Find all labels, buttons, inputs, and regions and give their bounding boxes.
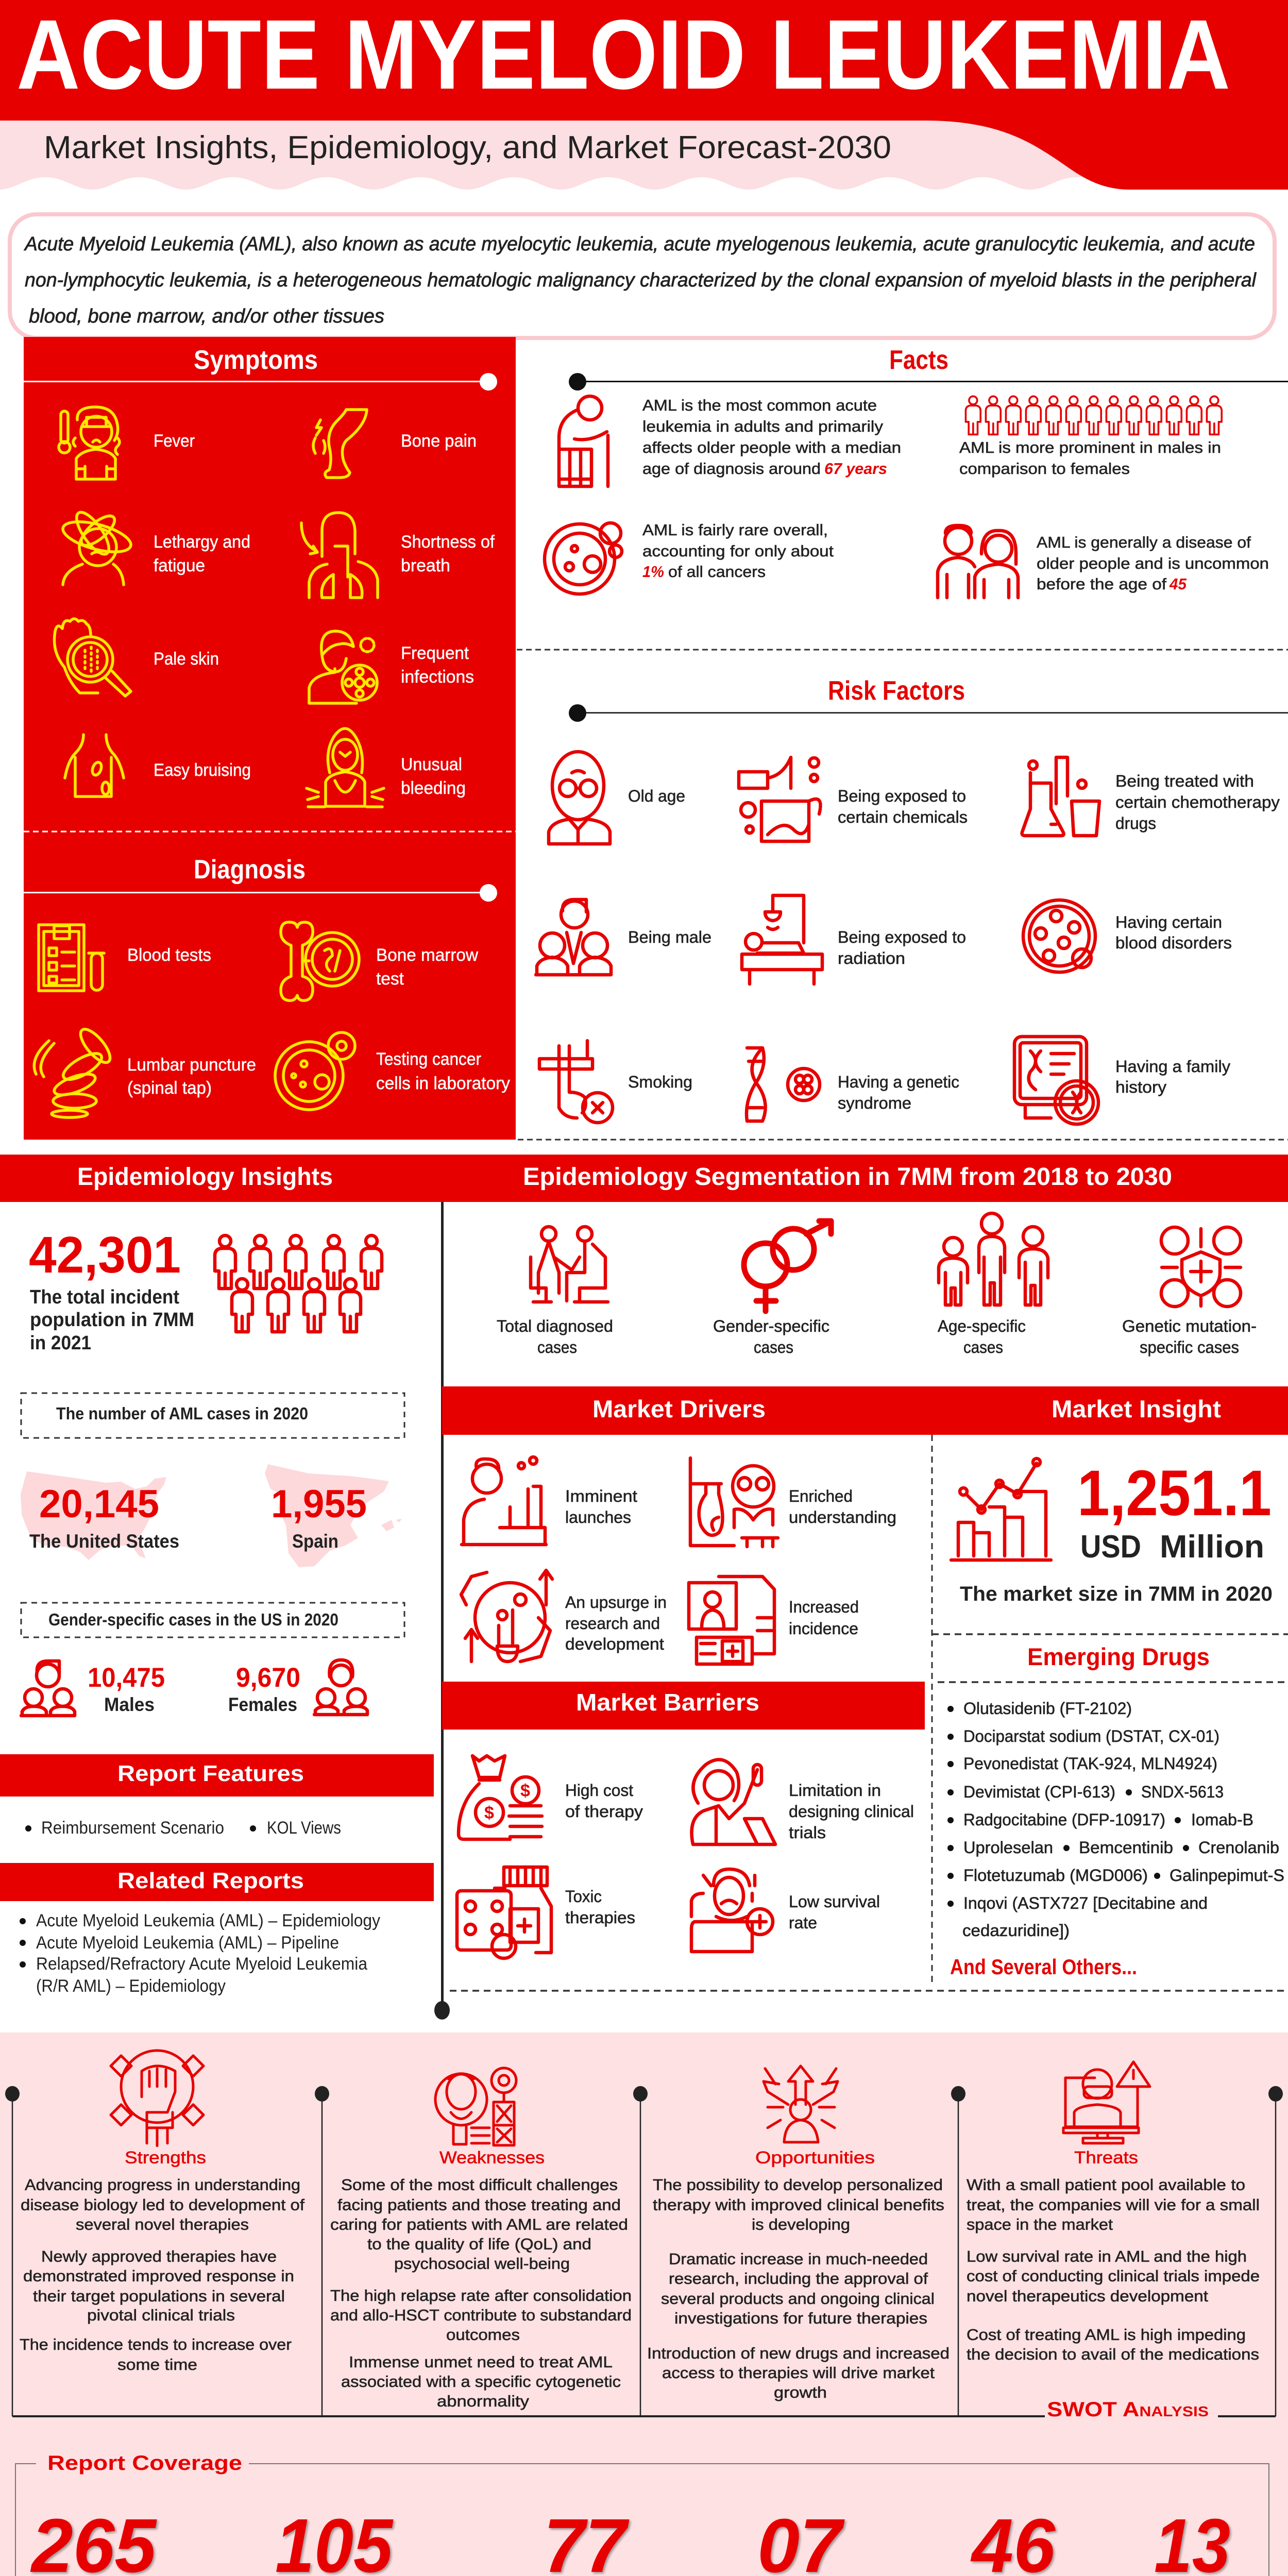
panel: market barriers xyxy=(442,1682,925,1958)
intro definition box xyxy=(10,214,1275,338)
icon: easy bruising xyxy=(65,735,124,796)
icon: old age xyxy=(549,752,610,844)
label: unusual bleeding: bleeding xyxy=(401,778,466,798)
label: high cost xyxy=(565,1781,643,1821)
drug list: Devimistat (CPI-613) xyxy=(963,1783,1115,1801)
header banner xyxy=(0,0,1288,190)
text: threats: novel therapeutics development xyxy=(967,2287,1208,2305)
intro definition box: non-lymphocytic leukemia, is a heterogeneous hematologic malignancy characterized by the clonal expansion of myeloid blasts in the peripheral xyxy=(25,269,1257,291)
stat: market size: Million xyxy=(1160,1529,1264,1565)
label: age-specific: cases xyxy=(963,1338,1003,1357)
label: limitation xyxy=(789,1781,914,1842)
and several others: And Several Others... xyxy=(950,1955,1137,1979)
label: testing cancer cells: cells in laboratory xyxy=(376,1074,510,1093)
label: chemicals: certain chemicals xyxy=(838,808,968,826)
text: strengths: some time xyxy=(117,2355,197,2374)
fact: older people: before the age of xyxy=(1037,575,1166,593)
text: threats: cost of conducting clinical trials impede xyxy=(967,2267,1260,2285)
label: blood tests: Blood tests xyxy=(127,945,211,965)
text: opportunities: research, including the approval of xyxy=(669,2269,928,2287)
drug list: Inqovi (ASTX727 [Decitabine and xyxy=(963,1894,1208,1912)
text: weaknesses: The high relapse rate after consolidation xyxy=(330,2286,632,2304)
lower pink background xyxy=(0,2032,1288,2576)
fact: most common xyxy=(642,396,901,478)
label: lethargy and fatigue: fatigue xyxy=(154,556,205,575)
text: threats: treat, the companies will vie for a small xyxy=(967,2196,1260,2214)
label: unusual bleeding: Unusual xyxy=(401,755,462,774)
label: radiation: radiation xyxy=(838,949,905,968)
fact: older people: older people and is uncommon xyxy=(1037,554,1269,572)
icon: females xyxy=(314,1660,367,1715)
label: research upsurge: An upsurge in xyxy=(565,1593,667,1612)
text: weaknesses xyxy=(330,2176,632,2410)
text: threats: Cost of treating AML is high impeding xyxy=(967,2326,1246,2344)
section: report features xyxy=(0,1754,434,1838)
label: shortness of breath: Shortness of xyxy=(401,532,495,552)
label: imminent launches: Imminent xyxy=(565,1487,637,1505)
band: market barriers heading xyxy=(442,1682,925,1730)
icon: threats xyxy=(1063,2062,1150,2143)
drug list: Flotetuzumab (MGD006) xyxy=(963,1866,1148,1885)
intro definition box: Acute Myeloid Leukemia (AML), also known as acute myelocytic leukemia, acute myelogenous leukemia, acute granulocytic leukemia, and acute xyxy=(24,233,1255,255)
icon: population figures xyxy=(215,1235,382,1332)
icon: age groups xyxy=(939,1213,1048,1305)
icon: pale skin xyxy=(54,619,131,696)
text: weaknesses: caring for patients with AML are related xyxy=(330,2215,628,2233)
drug list: Dociparstat sodium (DSTAT, CX-01) xyxy=(963,1727,1219,1745)
icon: smoking xyxy=(539,1041,613,1123)
icon: lumbar puncture xyxy=(34,1025,115,1117)
text: strengths: disease biology led to development of xyxy=(21,2196,304,2214)
label: testing cancer cells: Testing cancer xyxy=(376,1049,481,1069)
text: strengths: The incidence tends to increase over xyxy=(20,2335,292,2353)
panel: symptoms and diagnosis xyxy=(24,337,516,1140)
band: epidemiology headers: Epidemiology Insights xyxy=(77,1163,333,1191)
map: United States xyxy=(21,1471,179,1560)
heading: strengths: Strengths xyxy=(125,2148,206,2167)
label: chemotherapy xyxy=(1115,772,1280,833)
text: weaknesses: abnormality xyxy=(437,2392,530,2410)
label: total diagnosed: cases xyxy=(537,1338,577,1357)
panel: epidemiology insights xyxy=(21,1226,404,1716)
icon: high cost: $ xyxy=(484,1803,494,1823)
drug list: Pevonedistat (TAK-924, MLN4924) xyxy=(963,1754,1217,1773)
label: age-specific xyxy=(938,1317,1026,1357)
label: increased incidence: incidence xyxy=(789,1619,858,1638)
heading: weaknesses: Weaknesses xyxy=(439,2148,545,2167)
band: market drivers and insight xyxy=(442,1386,1288,1435)
label: bone marrow test: Bone marrow xyxy=(376,945,478,965)
icon: chemicals xyxy=(739,757,820,841)
label: shortness of breath xyxy=(401,532,495,575)
label: lethargy and fatigue: Lethargy and xyxy=(154,532,250,552)
heading: threats: Threats xyxy=(1074,2148,1138,2167)
text: opportunities: access to therapies will drive market xyxy=(662,2364,935,2382)
section: related reports xyxy=(0,1863,434,1996)
stat: 42,301: in 2021 xyxy=(30,1332,91,1354)
coverage stats xyxy=(30,2503,1230,2576)
heading: report coverage: Report Coverage xyxy=(47,2452,242,2475)
drug list: Crenolanib xyxy=(1198,1838,1279,1857)
label: increased incidence xyxy=(789,1598,859,1638)
label: SWOT analysis: SWOT Analysis xyxy=(1047,2398,1209,2421)
label: chemotherapy: Being treated with xyxy=(1115,772,1254,790)
heading: facts: Facts xyxy=(889,345,948,375)
label: lethargy and fatigue xyxy=(154,532,250,575)
section: related reports: (R/R AML) – Epidemiology xyxy=(36,1976,226,1996)
label: high cost: High cost xyxy=(565,1781,633,1800)
icon: bone pain xyxy=(313,410,367,478)
band: epidemiology headers: Epidemiology Segmentation in 7MM from 2018 to 2030 xyxy=(523,1163,1172,1191)
drug list: Galinpepimut-S xyxy=(1170,1866,1284,1885)
icon: testing cancer cells xyxy=(275,1032,355,1110)
text: strengths: Newly approved therapies have xyxy=(41,2247,277,2265)
icon: genetic syndrome xyxy=(747,1048,820,1121)
text: weaknesses: psychosocial well-being xyxy=(394,2255,570,2273)
label: low survival: rate xyxy=(789,1913,817,1932)
fact: rare: AML is fairly rare overall, xyxy=(642,521,828,539)
stat: market size: 1,251.1 xyxy=(1077,1458,1272,1529)
band: market barriers heading: Market Barriers xyxy=(576,1689,759,1716)
icon: increased incidence xyxy=(689,1577,774,1664)
label: genetic mutation: specific cases xyxy=(1140,1338,1239,1357)
section: related reports: Related Reports xyxy=(117,1868,304,1893)
icon: being male xyxy=(536,900,611,975)
heading: symptoms: Symptoms xyxy=(194,345,318,375)
label: enriched understanding: Enriched xyxy=(789,1487,853,1505)
icon: toxic therapies xyxy=(457,1867,551,1958)
icon: shortness of breath xyxy=(301,513,378,598)
label: family history: Having a family xyxy=(1115,1057,1230,1076)
label: gender-specific: Gender-specific xyxy=(713,1317,829,1335)
icon: high cost xyxy=(459,1756,542,1839)
heading: risk factors xyxy=(569,676,1288,722)
label: lumbar puncture xyxy=(127,1055,256,1098)
icon: gender symbols xyxy=(744,1221,831,1311)
label: chemotherapy: certain chemotherapy xyxy=(1115,793,1280,811)
text: opportunities: The possibility to develop personalized xyxy=(653,2176,943,2194)
label: being male: Being male xyxy=(628,928,711,946)
icon: fever xyxy=(59,407,120,479)
heading: risk factors: Risk Factors xyxy=(828,676,965,706)
label: blood disorders xyxy=(1115,913,1232,952)
section: related reports: Acute Myeloid Leukemia (AML) – Pipeline xyxy=(36,1933,339,1953)
label: genetic syndrome xyxy=(838,1073,959,1112)
panel: risk factors xyxy=(536,676,1288,1124)
section: report features: KOL Views xyxy=(267,1818,341,1838)
stat: market size: USD xyxy=(1080,1529,1141,1565)
fact: males: AML is more prominent in males in xyxy=(959,438,1221,456)
label: total diagnosed: Total diagnosed xyxy=(497,1317,613,1335)
text: strengths: demonstrated improved response in xyxy=(23,2267,294,2285)
icon: chemotherapy drugs xyxy=(1022,757,1099,836)
label: low survival: Low survival xyxy=(789,1892,880,1911)
label: gender-specific: cases xyxy=(754,1338,793,1357)
icon: enriched understanding xyxy=(690,1458,778,1547)
icon: row of people xyxy=(965,396,1222,434)
dashed label: gender-specific cases: Gender-specific cases in the US in 2020 xyxy=(48,1610,338,1629)
label: toxic therapies xyxy=(565,1887,635,1927)
label: unusual bleeding xyxy=(401,755,466,798)
text: opportunities: Dramatic increase in much-needed xyxy=(669,2250,928,2268)
label: increased incidence: Increased xyxy=(789,1598,859,1616)
label: frequent infections: Frequent xyxy=(401,643,469,663)
stat: females: 9,670 xyxy=(236,1663,300,1693)
band: market drivers and insight: Market Insight xyxy=(1052,1395,1221,1422)
label: toxic therapies: therapies xyxy=(565,1908,635,1927)
panel: report coverage xyxy=(15,2452,1269,2576)
label: blood disorders: Having certain xyxy=(1115,913,1222,931)
icon: imminent launches xyxy=(462,1457,546,1545)
label: age-specific: Age-specific xyxy=(938,1317,1026,1335)
map: Spain xyxy=(265,1464,402,1567)
label: research upsurge: research and xyxy=(565,1614,660,1633)
intro definition box: blood, bone marrow, and/or other tissues xyxy=(29,306,384,327)
heading: facts xyxy=(569,345,1288,391)
fact: rare: of all cancers xyxy=(668,563,766,581)
drug list: cedazuridine]) xyxy=(962,1921,1070,1940)
fact: rare: accounting for only about xyxy=(642,542,834,560)
subtitle: Market Insights, Epidemiology, and Market Forecast-2030 xyxy=(44,130,891,165)
label: bone pain: Bone pain xyxy=(401,431,477,451)
label: enriched understanding xyxy=(789,1487,896,1527)
label: research upsurge: development xyxy=(565,1635,664,1653)
fact: rare: 1% xyxy=(642,563,664,581)
icon: frequent infections xyxy=(309,631,377,703)
panel: emerging drugs xyxy=(938,1643,1288,1979)
map: United States: 20,145 xyxy=(39,1482,159,1526)
text: weaknesses: Some of the most difficult challenges xyxy=(341,2176,618,2194)
label: frequent infections: infections xyxy=(401,667,474,687)
label: limitation: Limitation in xyxy=(789,1781,881,1800)
icon: family history xyxy=(1014,1037,1098,1124)
map: United States: The United States xyxy=(29,1531,179,1552)
text: threats: the decision to avail of the medications xyxy=(967,2345,1259,2363)
icon: low survival xyxy=(691,1869,773,1952)
section: related reports: Acute Myeloid Leukemia (AML) – Epidemiology xyxy=(36,1911,380,1930)
label: imminent launches: launches xyxy=(565,1508,631,1527)
dashed label: gender-specific cases xyxy=(21,1603,404,1637)
icon: unusual bleeding xyxy=(307,728,384,807)
stat: market size: The market size in 7MM in 2020 xyxy=(960,1583,1273,1605)
icon: lethargy and fatigue xyxy=(60,507,134,585)
label: testing cancer cells xyxy=(376,1049,510,1093)
icon: total diagnosed xyxy=(531,1227,608,1302)
swot frame xyxy=(5,2086,1283,2416)
stat: 42,301 xyxy=(29,1226,194,1354)
text: weaknesses: facing patients and those treating and xyxy=(337,2196,621,2214)
dashed label: number of cases: The number of AML cases in 2020 xyxy=(56,1404,308,1423)
vertical divider xyxy=(434,1202,450,2020)
fact: most common: age of diagnosis around xyxy=(642,460,821,478)
text: weaknesses: associated with a specific cytogenetic xyxy=(341,2372,621,2391)
fact: most common: AML is the most common acute xyxy=(642,396,877,414)
text: strengths: their target populations in several xyxy=(33,2287,285,2305)
label: lumbar puncture: Lumbar puncture xyxy=(127,1055,256,1075)
text: threats: With a small patient pool available to xyxy=(967,2176,1245,2194)
icon: genetic mutation xyxy=(1161,1227,1241,1307)
text: weaknesses: outcomes xyxy=(446,2326,520,2344)
text: strengths: Advancing progress in understanding xyxy=(25,2176,300,2194)
drug list: SNDX-5613 xyxy=(1141,1783,1224,1801)
label: blood disorders: blood disorders xyxy=(1115,934,1232,952)
label: total diagnosed xyxy=(497,1317,613,1357)
text: threats: Low survival rate in AML and the high xyxy=(967,2247,1247,2265)
fact: most common: 67 years xyxy=(824,460,887,478)
icon: blood disorders xyxy=(1023,900,1095,972)
icon: clinical trial limitation xyxy=(691,1759,775,1844)
label: shortness of breath: breath xyxy=(401,556,450,575)
label: bone marrow test xyxy=(376,945,478,989)
section: report features: Reimbursement Scenario xyxy=(41,1818,224,1838)
icon: radiation xyxy=(742,895,822,984)
fact: most common: affects older people with a median xyxy=(642,438,901,456)
text: opportunities: Introduction of new drugs and increased xyxy=(647,2344,950,2362)
stat: 42,301: population in 7MM xyxy=(30,1309,194,1331)
icon: cancer cell xyxy=(545,523,622,594)
label: frequent infections xyxy=(401,643,474,687)
label: high cost: of therapy xyxy=(565,1802,643,1821)
label: fever: Fever xyxy=(154,431,195,451)
band: market drivers and insight: Market Drivers xyxy=(592,1395,766,1422)
heading: emerging drugs: Emerging Drugs xyxy=(1027,1643,1210,1670)
label: low survival xyxy=(789,1892,880,1932)
icon: weaknesses xyxy=(435,2068,516,2145)
fact: older people: AML is generally a disease of xyxy=(1037,533,1251,551)
text: weaknesses: Immense unmet need to treat AML xyxy=(349,2353,613,2371)
drug list: Uproleselan xyxy=(963,1838,1053,1857)
label: chemicals xyxy=(838,787,968,826)
SWOT analysis xyxy=(5,2050,1283,2421)
label: genetic syndrome: Having a genetic xyxy=(838,1073,959,1091)
icon: opportunities xyxy=(764,2066,838,2142)
drug list: Iomab-B xyxy=(1191,1810,1253,1829)
stat: males: 10,475 xyxy=(88,1663,165,1693)
label: enriched understanding: understanding xyxy=(789,1508,896,1527)
icon: high cost: $ xyxy=(520,1781,530,1801)
text: strengths: pivotal clinical trials xyxy=(87,2306,235,2324)
text: strengths xyxy=(20,2176,304,2374)
icon: strengths xyxy=(111,2050,204,2146)
label: family history: history xyxy=(1115,1078,1166,1096)
label: gender-specific xyxy=(713,1317,829,1357)
section: related reports: Relapsed/Refractory Acute Myeloid Leukemia xyxy=(36,1954,367,1974)
label: genetic mutation xyxy=(1122,1317,1257,1357)
text: opportunities xyxy=(647,2176,950,2401)
text: opportunities: growth xyxy=(774,2383,827,2401)
panel: market insight xyxy=(951,1458,1273,1605)
text: opportunities: is developing xyxy=(752,2215,850,2233)
fact: older people: 45 xyxy=(1169,575,1187,593)
text: opportunities: investigations for future therapies xyxy=(674,2309,927,2327)
stat: market size xyxy=(960,1458,1273,1605)
label: chemotherapy: drugs xyxy=(1115,814,1156,833)
stat: 42,301: 42,301 xyxy=(29,1226,181,1284)
label: research upsurge xyxy=(565,1593,667,1653)
panel: facts xyxy=(545,345,1288,598)
text: weaknesses: to the quality of life (QoL) and xyxy=(367,2235,591,2253)
heading: diagnosis: Diagnosis xyxy=(194,855,306,885)
heading: opportunities: Opportunities xyxy=(755,2148,875,2167)
icon: males xyxy=(21,1661,75,1716)
label: genetic mutation: Genetic mutation- xyxy=(1122,1317,1257,1335)
label: smoking: Smoking xyxy=(628,1073,692,1091)
text: opportunities: several products and ongoing clinical xyxy=(661,2290,935,2308)
text: strengths: several novel therapies xyxy=(76,2215,249,2233)
icon: bar chart trend xyxy=(951,1459,1051,1560)
drug list xyxy=(947,1699,1284,1940)
heading: diagnosis xyxy=(24,855,497,902)
label: limitation: trials xyxy=(789,1823,826,1842)
panel: market drivers xyxy=(461,1457,896,1664)
icon: older couple xyxy=(938,526,1018,598)
label: limitation: designing clinical xyxy=(789,1802,914,1821)
text: threats xyxy=(967,2176,1260,2363)
label: old age: Old age xyxy=(628,787,685,805)
map: Spain: Spain xyxy=(292,1531,338,1552)
heading: symptoms xyxy=(24,345,497,391)
label: family history xyxy=(1115,1057,1230,1096)
text: opportunities: therapy with improved clinical benefits xyxy=(653,2196,944,2214)
label: chemicals: Being exposed to xyxy=(838,787,966,805)
stat: males xyxy=(88,1663,165,1715)
text: weaknesses: and allo-HSCT contribute to substandard xyxy=(330,2306,632,2324)
fact: males xyxy=(959,438,1221,478)
section: report features: Report Features xyxy=(117,1761,304,1786)
icon: elderly person with cane xyxy=(559,396,608,486)
fact: most common: leukemia in adults and primarily xyxy=(642,417,884,435)
fact: males: comparison to females xyxy=(959,460,1130,478)
label: genetic syndrome: syndrome xyxy=(838,1094,911,1112)
label: imminent launches xyxy=(565,1487,637,1527)
label: bone marrow test: test xyxy=(376,969,404,989)
icon: blood tests xyxy=(39,925,104,991)
map: Spain: 1,955 xyxy=(271,1482,367,1526)
icon: research upsurge xyxy=(461,1570,552,1662)
panel: epidemiology segmentation xyxy=(497,1213,1257,1357)
band: epidemiology headers xyxy=(0,1155,1288,1202)
drug list: Radgocitabine (DFP-10917) xyxy=(963,1810,1165,1829)
fact: older people xyxy=(1037,533,1269,593)
fact: rare xyxy=(642,521,834,581)
label: pale skin: Pale skin xyxy=(154,649,219,669)
stat: males: Males xyxy=(104,1694,155,1715)
stat: 42,301: The total incident xyxy=(30,1286,179,1308)
stat: females: Females xyxy=(228,1694,297,1715)
label: toxic therapies: Toxic xyxy=(565,1887,602,1906)
label: radiation: Being exposed to xyxy=(838,928,966,946)
text: threats: space in the market xyxy=(967,2215,1113,2233)
dashed label: number of cases xyxy=(21,1393,404,1438)
label: easy bruising: Easy bruising xyxy=(154,760,251,780)
drug list: Bemcentinib xyxy=(1079,1838,1173,1857)
label: radiation xyxy=(838,928,966,968)
icon: bone marrow test xyxy=(281,922,359,1001)
drug list: Olutasidenib (FT-2102) xyxy=(963,1699,1132,1718)
stat: females xyxy=(228,1663,300,1715)
label: lumbar puncture: (spinal tap) xyxy=(127,1078,212,1098)
